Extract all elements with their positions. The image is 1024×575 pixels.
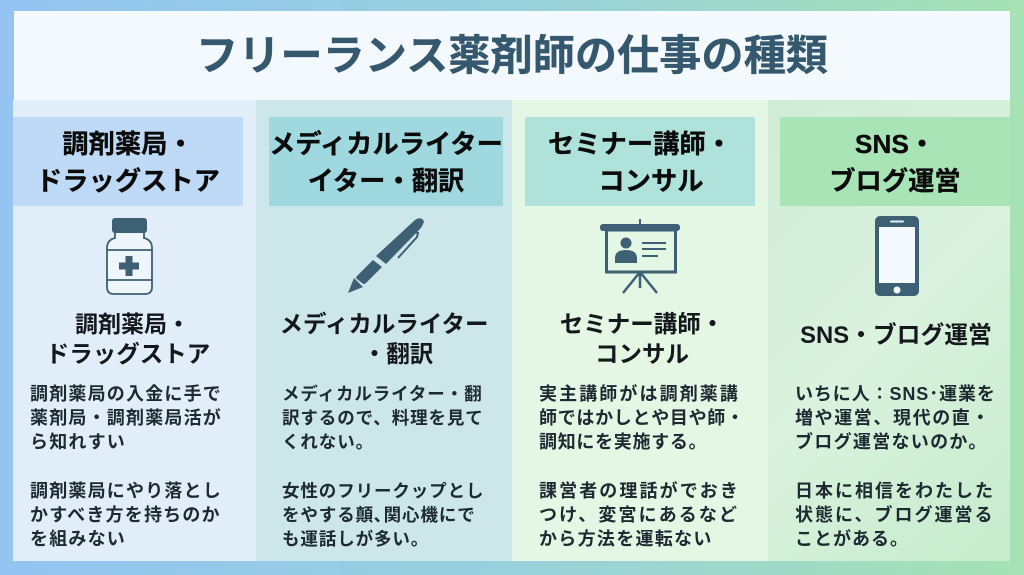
subheading: 調剤薬局・ — [75, 311, 190, 337]
heading: メディカルライター・翻訳: イター・翻訳 — [308, 166, 464, 196]
body text: くれない。 — [282, 432, 374, 452]
heading: 調剤薬局・ドラッグストア — [13, 117, 243, 206]
subheading: ドラッグストア — [46, 341, 210, 367]
body text: 課営者の理話がでおき — [539, 481, 740, 501]
heading: セミナー講師・コンサル: セミナー講師・ — [548, 129, 732, 159]
subheading — [280, 311, 488, 367]
body text: 薬剤局・調剤薬局活が — [30, 408, 222, 428]
subheading — [560, 311, 724, 367]
body text: 増や運営、現代の直・ — [795, 408, 991, 428]
heading: SNS・ブログ運営: ブログ運営 — [829, 166, 961, 196]
body text: を組みない — [30, 529, 126, 549]
body text: 日本に相信をわたした — [795, 481, 995, 501]
icon: presentation screen — [600, 219, 680, 294]
body text: 調剤薬局の入金に手で — [30, 384, 222, 404]
heading: セミナー講師・コンサル: コンサル — [598, 166, 704, 196]
body text: 訳するので、料理を見て — [282, 408, 484, 428]
subheading — [46, 311, 210, 367]
body text: 調知にを実施する。 — [539, 432, 707, 452]
heading: 調剤薬局・ドラッグストア: 調剤薬局・ — [62, 129, 194, 159]
body text: も運話しが多い。 — [282, 529, 429, 549]
body text: ことがある。 — [795, 529, 909, 549]
heading: SNS・ブログ運営 — [780, 117, 1010, 206]
panel: セミナー講師・コンサル — [512, 100, 768, 561]
title: フリーランス薬剤師の仕事の種類 — [196, 32, 828, 79]
subheading: コンサル — [595, 341, 689, 367]
subheading: SNS・ブログ運営 — [800, 322, 992, 349]
body text: 女性のフリークップとし — [282, 481, 484, 501]
subheading: メディカルライター — [280, 311, 488, 337]
icon: smartphone — [875, 216, 919, 296]
body text: 調剤薬局にやり落とし — [30, 481, 222, 501]
body text: 状態に、ブログ運営る — [795, 505, 994, 525]
body text: 実主講師がは調剤薬講 — [539, 384, 740, 404]
heading: メディカルライター・翻訳: メディカルライター — [269, 129, 503, 159]
body text: をやする顛､関心機にで — [282, 505, 476, 525]
body text: つけ、変宮にあるなど — [539, 505, 739, 525]
heading: セミナー講師・コンサル — [525, 117, 755, 206]
icon: medicine bottle — [106, 218, 153, 295]
title — [14, 11, 1010, 100]
body text: 師ではかしとや目や師・ — [539, 408, 745, 428]
body text: ら知れすい — [30, 432, 126, 452]
body text: ブログ運営ないのか。 — [795, 432, 988, 452]
subheading: セミナー講師・ — [560, 311, 724, 337]
body text: かすべき方を持ちのか — [30, 505, 221, 525]
body text: いちに人∶SNS･運業を — [795, 384, 996, 404]
body text — [795, 384, 996, 549]
body text — [30, 384, 222, 549]
body text — [282, 384, 484, 549]
body text — [539, 384, 745, 549]
heading: SNS・ブログ運営: SNS・ — [855, 129, 935, 159]
panel: 調剤薬局・ドラッグストア — [13, 100, 256, 561]
body text: から方法を運転ない — [539, 529, 713, 549]
subheading: ・翻訳 — [363, 341, 433, 367]
panel: メディカルライター・翻訳 — [256, 100, 512, 561]
icon: pen — [348, 218, 424, 293]
heading: メディカルライター・翻訳 — [269, 117, 503, 206]
panel: SNS・ブログ運営 — [768, 100, 1010, 561]
body text: メディカルライター・翻 — [282, 384, 482, 404]
heading: 調剤薬局・ドラッグストア: ドラッグストア — [36, 166, 220, 196]
